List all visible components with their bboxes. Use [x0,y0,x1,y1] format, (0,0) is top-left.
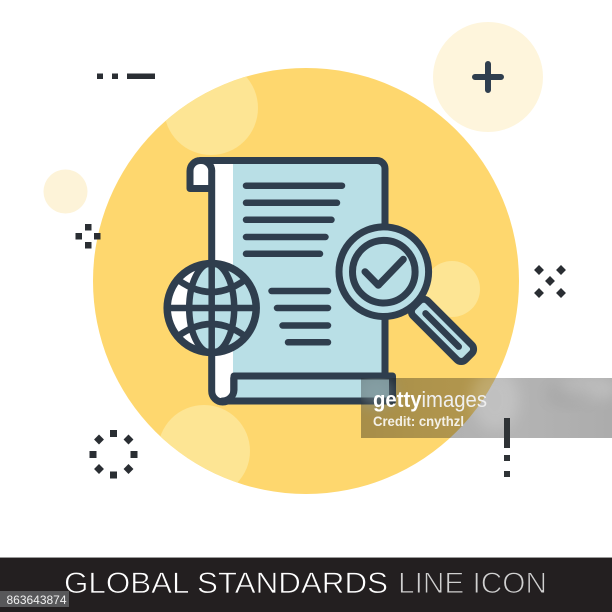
pale circle left [44,170,88,214]
icon: globe [166,260,262,356]
handle [409,297,476,364]
image id tag [0,591,69,607]
pale circle top right with plus icon [433,22,543,132]
title suffix: LINE ICON [398,567,547,600]
lens outer ring [339,227,429,316]
document outline [190,160,385,402]
white page edge [212,162,233,400]
large yellow circle with inner highlights [93,61,519,497]
decoration: dashes top left [97,74,155,79]
watermark logo: gettyimages [373,387,487,412]
title text: GLOBAL STANDARDS [64,567,388,600]
decoration: cross of dots [76,224,100,248]
decoration: x of dots [534,265,566,298]
decoration: ring of dots [90,430,138,478]
check mark [365,259,403,285]
lens inner ring [352,240,415,303]
title bar: 863643874 [6,593,67,607]
icon: magnifying glass with check [339,227,476,364]
lower text lines [272,291,328,342]
title bar [0,557,612,612]
watermark band [361,378,612,438]
upper text lines [246,186,342,254]
bottom fold [222,376,392,401]
document page fill [212,160,385,400]
decoration: vertical dashes right [504,418,510,477]
watermark credit: Credit: cnythzl [373,413,464,429]
rolled top corner [190,160,211,188]
icon: document scroll [190,160,392,402]
